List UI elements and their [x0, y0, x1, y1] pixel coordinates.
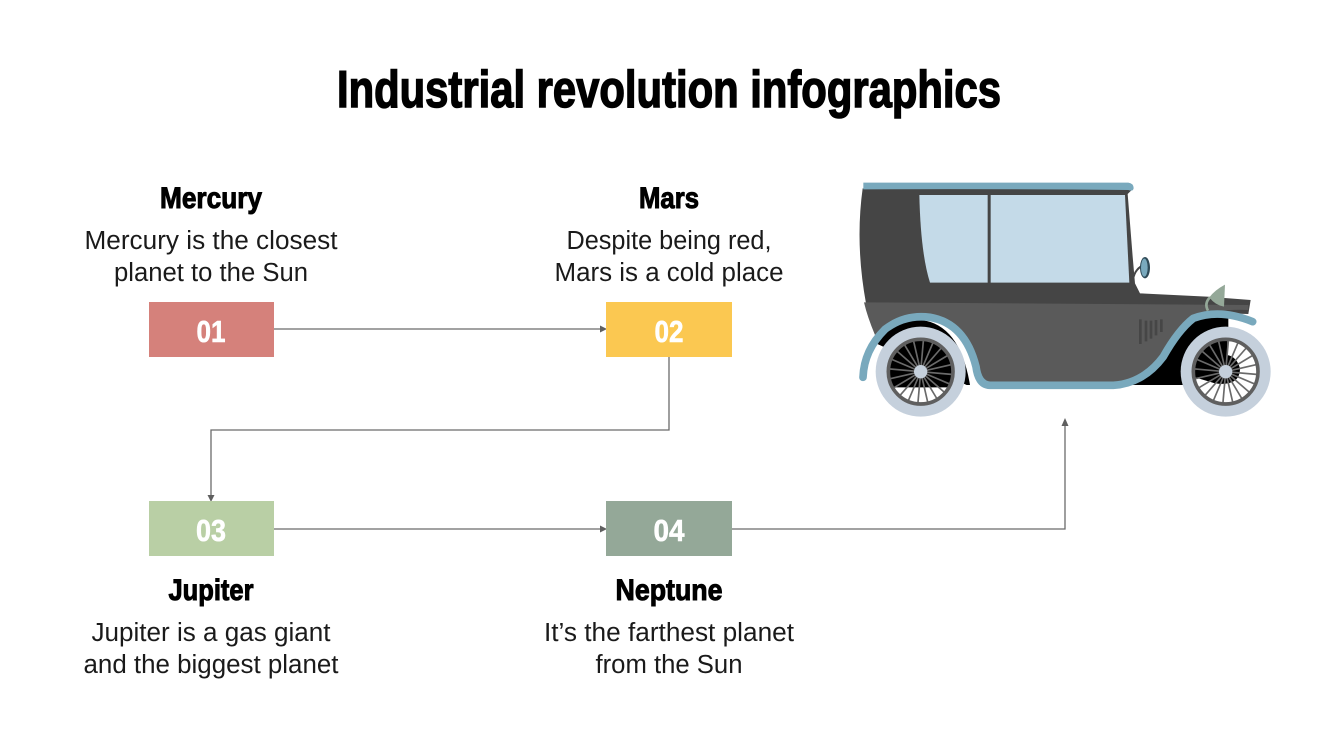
panel: Neptune	[544, 501, 794, 679]
car vents	[1140, 319, 1161, 344]
number box 02: 02	[654, 314, 684, 349]
text: Jupiter description	[84, 619, 338, 679]
car lower body	[864, 302, 1248, 383]
heading: Jupiter: Jupiter	[168, 574, 254, 607]
number box 04	[606, 501, 732, 556]
text: Neptune description: from the Sun	[596, 651, 742, 679]
text: Neptune description: It’s the farthest planet	[544, 619, 794, 647]
text: Mercury description: Mercury is the closest	[84, 227, 338, 255]
number box 01: 01	[196, 314, 226, 349]
text: Jupiter description: and the biggest planet	[84, 651, 338, 679]
rear wheel	[876, 327, 966, 417]
number box 03: 03	[196, 513, 226, 548]
text: Mars description	[554, 227, 784, 287]
car headlamp	[1206, 285, 1225, 311]
rear wheel spokes	[888, 339, 953, 404]
arrow: 03 to 04	[274, 526, 607, 532]
text: Mercury description: planet to the Sun	[114, 259, 308, 287]
number box 03	[149, 501, 274, 556]
text: Jupiter description: Jupiter is a gas giant	[92, 619, 330, 647]
arrow: 02 to 03	[208, 357, 669, 502]
car rear window	[919, 195, 988, 283]
number box 02	[606, 302, 732, 357]
panel: Mercury	[84, 182, 338, 357]
title: Industrial revolution infographics	[337, 61, 1001, 119]
panel: Mars	[554, 182, 784, 357]
panel: Jupiter	[84, 501, 338, 679]
car mirror	[1133, 257, 1150, 283]
arrow: 01 to 02	[274, 326, 607, 332]
heading: Neptune: Neptune	[616, 574, 722, 607]
car fender	[863, 314, 1253, 385]
car upper body	[860, 188, 1251, 314]
car chassis shadow	[876, 313, 1228, 385]
heading: Mars: Mars	[639, 182, 699, 215]
text: Mercury description	[84, 227, 338, 287]
number box 01	[149, 302, 274, 357]
text: Neptune description	[544, 619, 794, 679]
text: Mars description: Mars is a cold place	[554, 259, 784, 287]
car front window	[991, 195, 1129, 283]
number box 04: 04	[654, 513, 685, 548]
arrow: 04 to car	[732, 418, 1068, 529]
icon: vintage car	[860, 183, 1271, 417]
front wheel spokes	[1193, 339, 1258, 404]
front wheel	[1181, 327, 1271, 417]
car roof	[863, 183, 1134, 191]
heading: Mercury: Mercury	[160, 182, 262, 215]
text: Mars description: Despite being red,	[566, 227, 772, 255]
